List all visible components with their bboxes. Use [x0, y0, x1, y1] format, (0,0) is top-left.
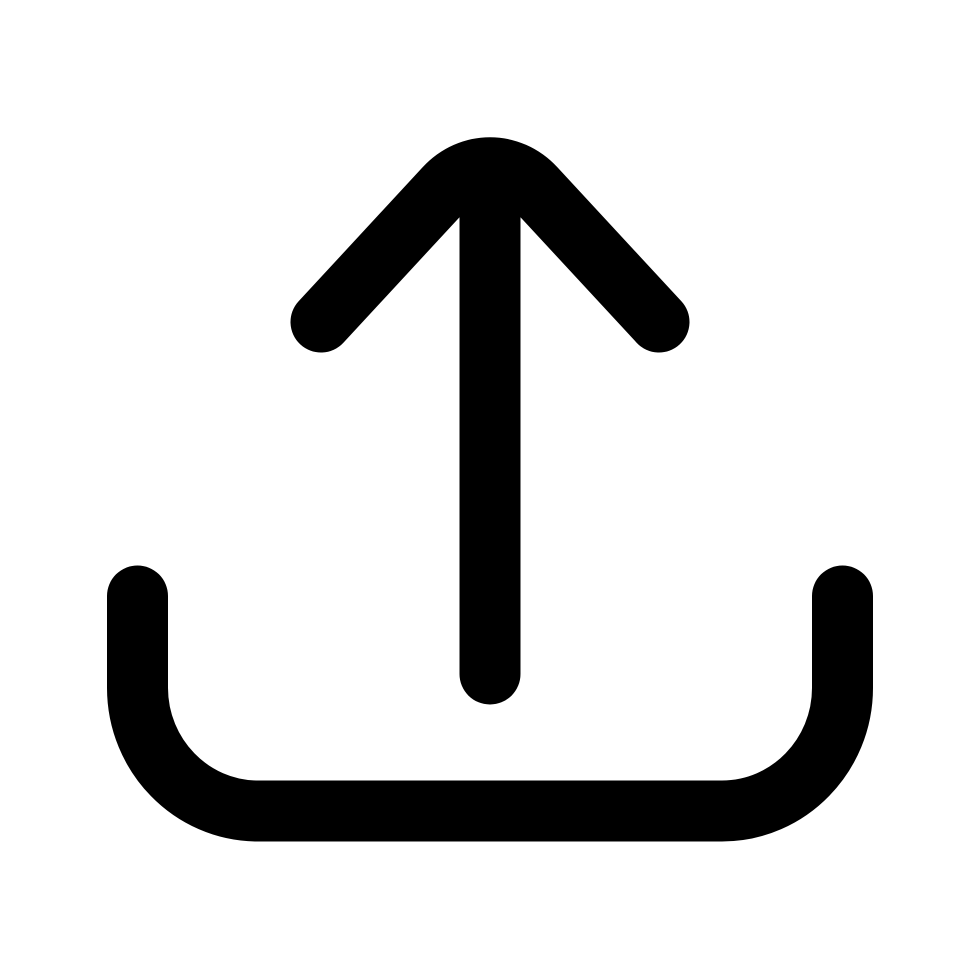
arrow shaft: [460, 170, 520, 674]
arrow head: [321, 168, 659, 322]
arrow: upward: [321, 168, 659, 674]
tray: [138, 596, 842, 811]
